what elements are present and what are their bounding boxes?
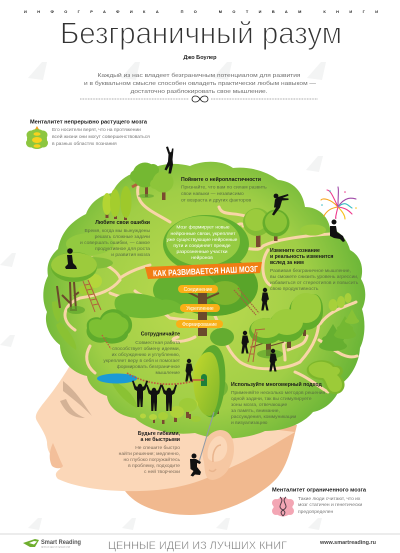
panel: growth mindset note: [26, 120, 150, 149]
text: collaborate: Совместная работа: [135, 340, 180, 346]
text: how the brain forms connections: уже существующие нейронные: [167, 236, 238, 243]
heading: fixed mindset: Менталитет ограниченного мозга: [272, 488, 366, 494]
logo icon: [23, 539, 39, 547]
icon: green brain with flower: [26, 126, 48, 149]
text: collaborate: мышление: [155, 371, 180, 376]
figure: standing arms raised on top tree: [164, 146, 174, 174]
figure: kneeling on platform: [65, 248, 77, 269]
divider with infinity icon: [80, 96, 318, 102]
figure: walking near bridge: [261, 288, 269, 310]
watermarks: [0, 62, 326, 530]
central lobe: [163, 215, 249, 273]
text: neuroplasticity: свои навыки — независимо: [181, 192, 244, 197]
text: collaborate: формировать безграничное: [117, 364, 180, 370]
pines and bushes right: [307, 293, 359, 394]
text: growth mindset: всей жизни они могут совершенствоваться: [52, 133, 150, 140]
text: collaborate: укрепляет веру в себя и помогает: [103, 358, 181, 364]
text: fixed mindset: предопределен: [298, 510, 334, 515]
head: [36, 360, 297, 515]
text: multidimensional approach: рассуждения, коммуникации: [231, 415, 297, 420]
heading: growth mindset: Менталитет непрерывно растущего мозга: [30, 120, 147, 126]
bottom small trees: [140, 398, 197, 424]
text: love your mistakes: [80, 219, 150, 258]
bush on right lobe: [300, 224, 326, 236]
text: neuroplasticity: Признайте, что вам по силам развить: [181, 184, 267, 190]
oval tree with door: [184, 345, 228, 422]
eyebrow and eye: [60, 381, 92, 418]
text: change perception: вслед за ним: [270, 260, 304, 266]
left platform tree: [51, 252, 102, 314]
figure: sitting on lobe: [330, 220, 345, 242]
intro text: [84, 72, 316, 95]
big right tree: [234, 288, 323, 362]
text: fixed mindset: мозг статичен и генетически: [298, 503, 363, 508]
text: how the brain forms connections: [167, 224, 238, 261]
text: collaborate: [103, 330, 181, 376]
paths: [65, 187, 357, 392]
text: multidimensional approach: [231, 381, 326, 426]
text: love your mistakes: и совершать ошибки, — самое: [80, 240, 150, 246]
panel: fixed mindset note: [272, 488, 366, 516]
text: how the brain forms connections: нейронные связи, укрепляет: [171, 230, 236, 237]
figures: three with raised arms: [132, 380, 177, 411]
text: be flexible: но глубоко погружайтесь: [123, 456, 180, 463]
middle-left cloud tree: [87, 309, 132, 349]
text: fixed mindset: [298, 496, 363, 515]
text: how the brain forms connections: пути и соединяет прежде: [173, 244, 231, 249]
pill: strengthening: Укрепление: [186, 306, 214, 312]
text: change perception: избавиться от стереотипов и повысить: [270, 280, 359, 286]
text: change perception: свою продуктивность: [270, 287, 319, 292]
text: be flexible: Не спешите быстро: [135, 445, 180, 451]
pill: connection: Соединение: [184, 287, 213, 293]
text: multidimensional approach: за память, внимание,: [231, 409, 280, 414]
icon: pink brain with DNA: [272, 497, 294, 516]
rope bridge from centre: [234, 288, 259, 315]
cypress trees: [102, 186, 132, 220]
central tree lobes: [115, 256, 258, 346]
text: change perception: [270, 248, 359, 292]
header tagline: ИНФОГРАФИКА ПО МОТИВАМ КНИГИ: [24, 9, 378, 14]
text: love your mistakes: продуктивное для роста: [95, 247, 150, 252]
text: fixed mindset: Такие люди считают, что их: [298, 496, 361, 502]
intro text: Каждый из нас владеет безграничным потенциалом для развития: [98, 72, 300, 79]
slogan: ЦЕННЫЕ ИДЕИ ИЗ ЛУЧШИХ КНИГ: [108, 540, 287, 552]
text: be flexible: с ней творчески: [144, 468, 180, 475]
intro text: достаточно разблокировать свое мышление.: [130, 89, 268, 95]
text: love your mistakes: и развития мозга: [111, 253, 150, 258]
figure: climbing rope to ear: [190, 412, 214, 476]
top-left trees: [130, 162, 174, 200]
figure: on rope bridge: [185, 359, 193, 382]
text: change perception: Развивая безграничное мышление,: [270, 268, 351, 274]
website: www.smartreading.ru: [319, 540, 377, 546]
text: be flexible: Будьте гибкими,: [138, 430, 181, 437]
figure: jumping: [272, 194, 288, 216]
pill: connection: [178, 285, 218, 293]
title: Безграничный разум: [60, 16, 342, 50]
text: change perception: Измените сознание: [270, 248, 320, 254]
text: multidimensional approach: Используйте многомерный подход: [231, 381, 322, 388]
text: change perception: и реальность изменится: [270, 254, 333, 260]
pill: strengthening: [180, 304, 220, 312]
ear: [203, 430, 234, 480]
pill: formation: [176, 320, 223, 328]
text: collaborate: способствует обмену идеями,: [112, 346, 180, 352]
text: how the brain forms connections: нейронов: [191, 254, 213, 261]
text: change perception: вы сможете снизить уровень агрессии,: [270, 275, 358, 280]
brain: [43, 146, 365, 438]
text: love your mistakes: решать сложные задачи: [95, 235, 150, 240]
brand name: Smart Reading: [41, 539, 81, 546]
intro text: и в буквальном смысле способен овладеть практически любым навыком —: [84, 81, 316, 87]
figure: walking on path: [269, 349, 277, 372]
text: neuroplasticity: Поймите о нейропластичности: [181, 176, 261, 183]
text: be flexible: а не быстрыми: [141, 436, 180, 443]
pill: formation: Формирование: [182, 322, 217, 328]
text: multidimensional approach: одной задачи, так вы стимулируете: [231, 395, 312, 402]
author: Джо Боулер: [183, 55, 217, 61]
text: collaborate: Сотрудничайте: [141, 330, 180, 338]
text: be flexible: [119, 430, 181, 475]
footer: [0, 534, 400, 552]
ladder: [83, 280, 101, 312]
text: be flexible: найти решение; медленно,: [119, 450, 180, 457]
text: how the brain forms connections: разрозненные участки: [177, 250, 228, 255]
ladder to tree: [248, 329, 265, 362]
text: neuroplasticity: от возраста и других факторов: [181, 198, 251, 204]
text: how the brain forms connections: Мозг формирует новые: [176, 224, 230, 230]
text: growth mindset: [52, 127, 150, 147]
text: multidimensional approach: Применяйте несколько методов решения: [231, 389, 326, 396]
footer: Ценные идеи из лучших книг: [41, 546, 71, 548]
text: neuroplasticity: [181, 176, 267, 204]
lake and rope bridge: [97, 373, 198, 384]
left bushes and lobes: [52, 233, 137, 408]
figure: climbing ladder: [241, 331, 249, 354]
text: love your mistakes: Любите свои ошибки: [95, 219, 150, 226]
text: multidimensional approach: зоны мозга, отвечающие: [231, 403, 288, 408]
text: multidimensional approach: и визуализацию: [231, 421, 268, 426]
banner: how the brain develops: КАК РАЗВИВАЕТСЯ НАШ МОЗГ: [153, 264, 258, 278]
text: love your mistakes: Время, когда мы вынуждены: [85, 228, 150, 234]
text: be flexible: в проблему, подходите: [128, 463, 180, 469]
text: collaborate: их обсуждению и углублению,: [112, 352, 180, 358]
text: growth mindset: в разных областях познания: [52, 141, 117, 147]
firework: [321, 187, 357, 219]
text: growth mindset: Его носители верят, что на протяжении: [52, 127, 141, 133]
top-right trees: [243, 208, 290, 247]
